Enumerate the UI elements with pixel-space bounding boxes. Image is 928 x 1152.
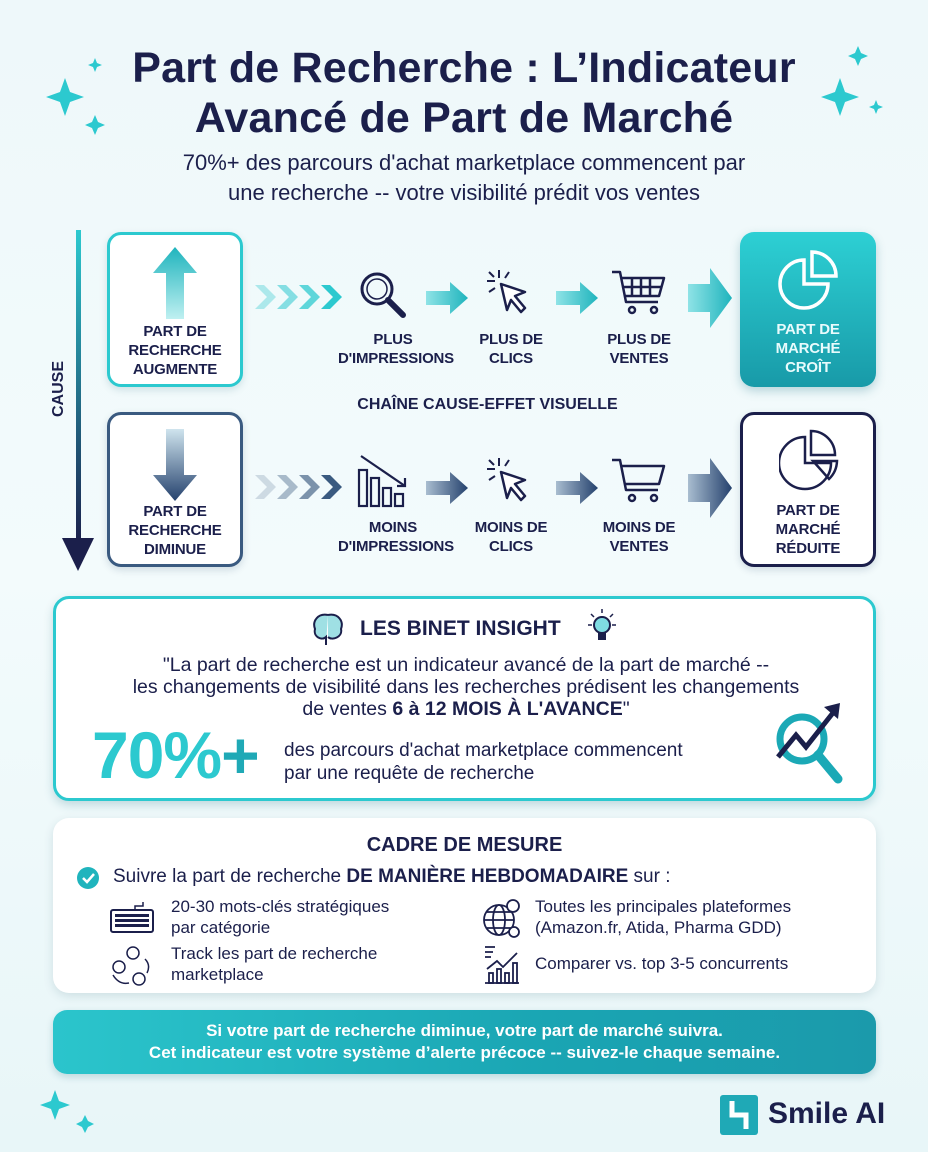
labels: MOINS xyxy=(369,519,417,536)
labels xyxy=(338,331,454,367)
box: part de marché croît xyxy=(740,232,876,387)
box: part de marché réduite: MARCHÉ xyxy=(776,521,840,538)
stat text: des parcours d'achat marketplace commencent xyxy=(284,740,683,761)
quote: les changements de visibilité dans les recherches prédisent les changements xyxy=(133,676,799,698)
chain top: PLUS DE xyxy=(479,331,543,348)
box: part de recherche diminue: DIMINUE xyxy=(144,541,206,558)
labels: PLUS xyxy=(373,331,413,348)
icon: cursor xyxy=(487,270,526,314)
subtitle: une recherche -- votre visibilité prédit vos ventes xyxy=(228,180,700,205)
icon: brain xyxy=(313,614,343,645)
callout banner: Cet indicateur est votre système d’alerte précoce -- suivez-le chaque semaine. xyxy=(149,1043,780,1062)
arrow big xyxy=(688,458,732,518)
labels: D'IMPRESSIONS xyxy=(338,350,454,367)
stat text xyxy=(284,740,683,784)
item: keywords xyxy=(110,897,389,937)
arrow small xyxy=(556,472,598,504)
icon: cart xyxy=(612,270,666,314)
box: part de marché réduite: PART DE xyxy=(776,502,840,519)
quote: "La part de recherche est un indicateur avancé de la part de marché -- xyxy=(163,654,769,676)
item: keywords: par catégorie xyxy=(171,918,270,937)
subtitle xyxy=(183,150,745,205)
checkbox line: Suivre la part de recherche DE MANIÈRE HEBDOMADAIRE sur : xyxy=(113,866,670,887)
box: part de marché réduite: RÉDUITE xyxy=(776,540,840,557)
item: platforms: Toutes les principales plateformes xyxy=(535,897,791,916)
item: platforms xyxy=(483,897,791,938)
title: Avancé de Part de Marché xyxy=(195,94,733,142)
chain bottom: VENTES xyxy=(610,538,668,555)
arrow: cause vertical: CAUSE xyxy=(50,361,67,417)
chain caption: CHAÎNE CAUSE-EFFET VISUELLE xyxy=(357,396,618,413)
callout banner: Si votre part de recherche diminue, votre part de marché suivra. xyxy=(206,1021,723,1040)
heading cadre: CADRE DE MESURE xyxy=(367,834,562,856)
title xyxy=(132,44,796,142)
arrow small xyxy=(556,282,598,314)
item: track: Track les part de recherche xyxy=(171,944,377,963)
callout banner xyxy=(53,1010,876,1074)
chevrons bottom xyxy=(255,475,342,499)
item: platforms: (Amazon.fr, Atida, Pharma GDD) xyxy=(535,918,782,937)
box: part de marché croît: PART DE xyxy=(776,321,840,338)
box: part de marché réduite xyxy=(740,412,876,567)
logo: smile ai xyxy=(720,1095,885,1135)
icon: bulb xyxy=(588,609,616,640)
box: part de recherche augmente: PART DE xyxy=(143,323,207,340)
arrow small xyxy=(426,472,468,504)
item: compare xyxy=(485,946,788,984)
quote xyxy=(133,654,799,720)
box: part de recherche diminue xyxy=(107,412,243,567)
logo: smile ai: Smile AI xyxy=(768,1097,885,1130)
box: part de recherche augmente: RECHERCHE xyxy=(128,342,222,359)
chain bottom: MOINS DE xyxy=(603,519,675,536)
chain top xyxy=(255,268,732,367)
title: Part de Recherche : L’Indicateur xyxy=(132,44,796,92)
chain bottom: MOINS DE xyxy=(475,519,547,536)
icon: cursor xyxy=(487,458,526,502)
icon: declining bars xyxy=(358,455,406,508)
arrow big xyxy=(688,268,732,328)
icon: analytics magnifier xyxy=(776,703,842,784)
chain top: VENTES xyxy=(610,350,668,367)
chevrons top xyxy=(255,285,342,309)
heading insight: LES BINET INSIGHT xyxy=(360,617,561,640)
icon: magnifier xyxy=(360,272,406,318)
item: keywords: 20-30 mots-clés stratégiques xyxy=(171,897,389,916)
quote: de ventes 6 à 12 MOIS À L'AVANCE" xyxy=(302,698,630,720)
box: part de recherche augmente: AUGMENTE xyxy=(133,361,217,378)
item: track xyxy=(112,944,377,986)
box: part de recherche diminue: PART DE xyxy=(143,503,207,520)
labels xyxy=(338,519,454,555)
chain top: CLICS xyxy=(489,350,533,367)
stat 70%+: 70%+ xyxy=(92,718,259,792)
panel: binet insight xyxy=(53,596,876,801)
item: compare: Comparer vs. top 3-5 concurrents xyxy=(535,954,788,973)
subtitle: 70%+ des parcours d'achat marketplace commencent par xyxy=(183,150,745,175)
arrow small xyxy=(426,282,468,314)
stat text: par une requête de recherche xyxy=(284,763,534,784)
box: part de marché croît: CROÎT xyxy=(785,359,831,376)
icon: empty cart xyxy=(612,458,666,502)
box: part de recherche augmente xyxy=(107,232,243,387)
box: part de marché croît: MARCHÉ xyxy=(776,340,840,357)
labels: D'IMPRESSIONS xyxy=(338,538,454,555)
chain top: PLUS DE xyxy=(607,331,671,348)
box: part de recherche diminue: RECHERCHE xyxy=(128,522,222,539)
panel: cadre de mesure xyxy=(53,818,876,993)
chain bottom: CLICS xyxy=(489,538,533,555)
arrow: cause vertical xyxy=(50,230,94,571)
chain bottom xyxy=(255,455,732,555)
item: track: marketplace xyxy=(171,965,264,984)
